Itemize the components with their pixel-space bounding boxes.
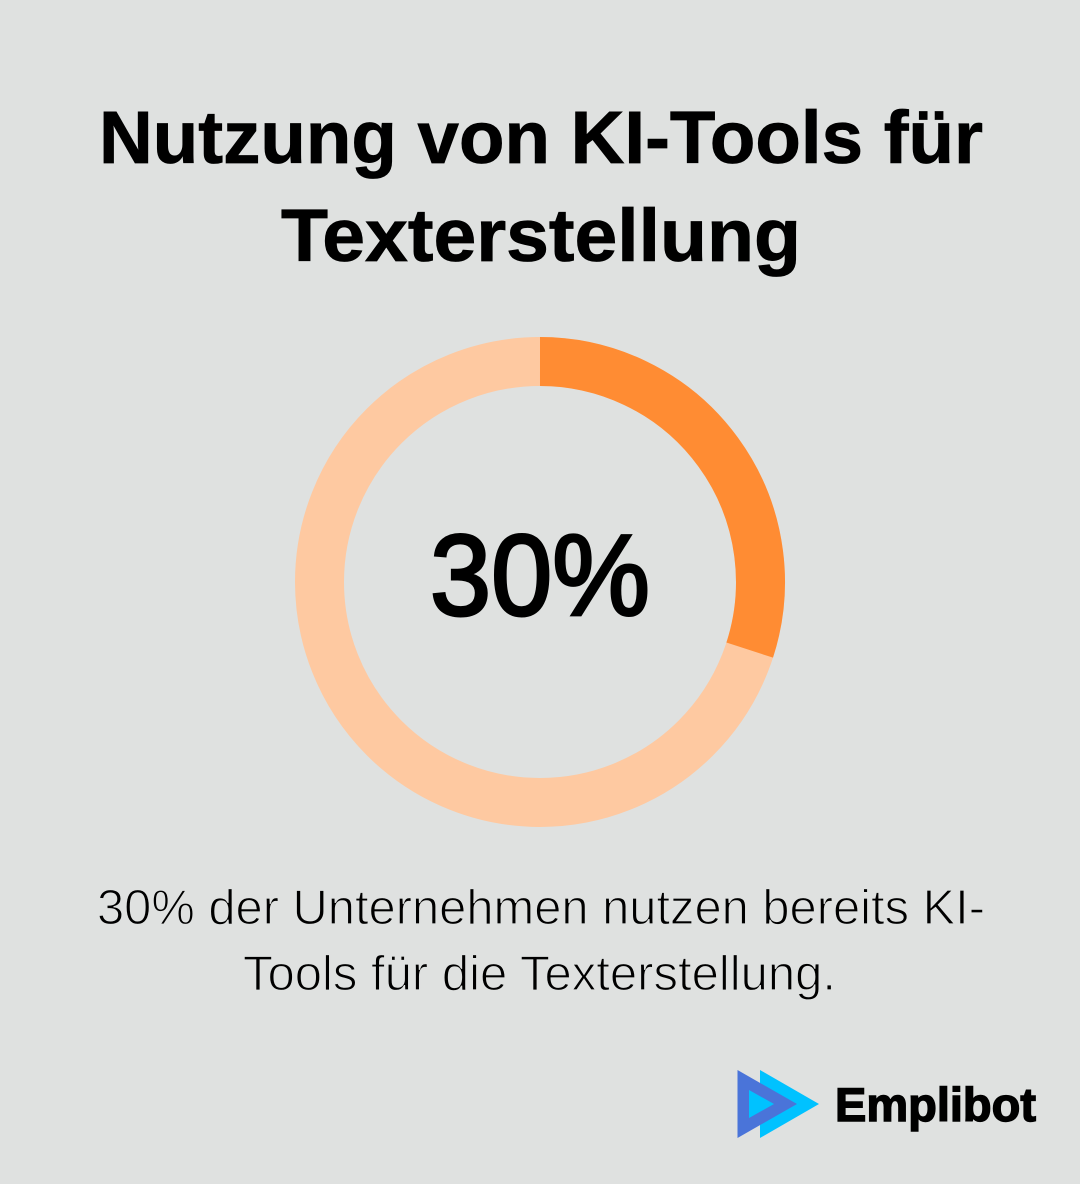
title: Texterstellung	[281, 194, 801, 277]
donut chart: 30 percent	[320, 362, 760, 802]
description: Tools für die Texterstellung.	[243, 947, 836, 1001]
description	[97, 881, 985, 1001]
center value: 30%	[430, 512, 650, 640]
donut track	[320, 362, 760, 802]
description: 30% der Unternehmen nutzen bereits KI-	[97, 881, 985, 935]
donut value arc	[540, 362, 760, 650]
title	[99, 96, 983, 277]
title: Nutzung von KI-Tools für	[99, 96, 983, 179]
wordmark: Emplibot	[835, 1078, 1036, 1131]
icon: play triangles	[738, 1070, 819, 1138]
logo: Emplibot	[738, 1070, 1036, 1138]
